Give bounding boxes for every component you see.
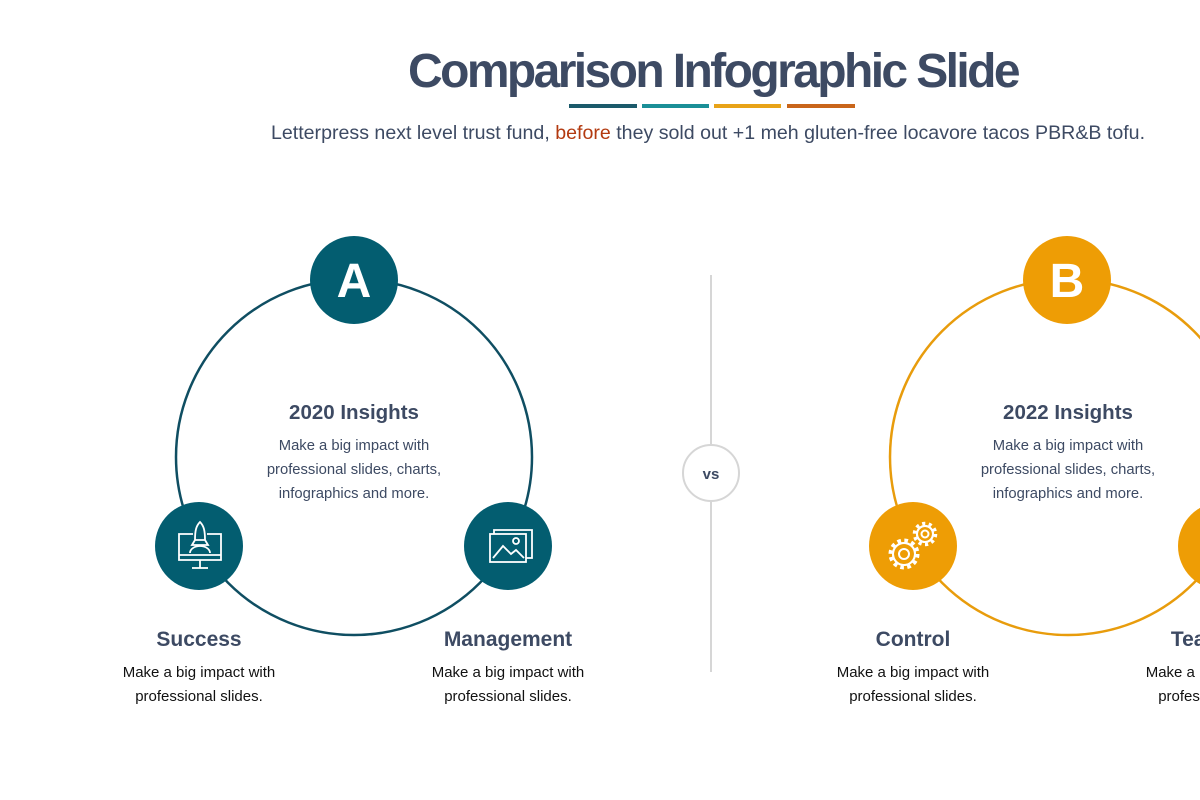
icon: gears (869, 502, 957, 590)
title: Comparison Infographic Slide (408, 45, 1018, 98)
badge A (310, 236, 398, 324)
panel B center text: Make a big impact with (993, 438, 1143, 454)
divider (683, 275, 739, 672)
panel B center text: professional slides, charts, (981, 462, 1155, 478)
subtitle: Letterpress next level trust fund, before they sold out +1 meh gluten-free locavore tacos PBR&B tofu. (271, 122, 1145, 144)
title underline bars (569, 104, 855, 108)
badge A: A (337, 255, 371, 308)
label: Control: Make a big impact with (837, 664, 989, 681)
panel A center text: professional slides, charts, (267, 462, 441, 478)
label: Management: Make a big impact with (432, 664, 584, 681)
icon: images (464, 502, 552, 590)
ring B (890, 279, 1200, 635)
panel B center text: 2022 Insights (1003, 401, 1133, 424)
panel A center text (267, 401, 441, 502)
badge B (1023, 236, 1111, 324)
badge B: B (1050, 255, 1084, 308)
panel A center text: infographics and more. (279, 486, 429, 502)
label: Success: Success (156, 628, 242, 651)
panel B center text: infographics and more. (993, 486, 1143, 502)
label: Management: professional slides. (444, 688, 572, 705)
icon: partially visible (1178, 508, 1200, 584)
icon: rocket monitor (155, 502, 243, 590)
label: Control: professional slides. (849, 688, 977, 705)
label: Success: Make a big impact with (123, 664, 275, 681)
label: Control: Control (876, 628, 950, 651)
panel A center text: Make a big impact with (279, 438, 429, 454)
divider: vs (703, 466, 719, 483)
label: Success: professional slides. (135, 688, 263, 705)
label: Control (837, 628, 989, 705)
label: Success (123, 628, 275, 705)
panel A center text: 2020 Insights (289, 401, 419, 424)
label: Management (432, 628, 584, 705)
panel B center text (981, 401, 1155, 502)
ring A (176, 279, 532, 635)
label: partially visible (1146, 628, 1200, 705)
label: Management: Management (444, 628, 572, 651)
